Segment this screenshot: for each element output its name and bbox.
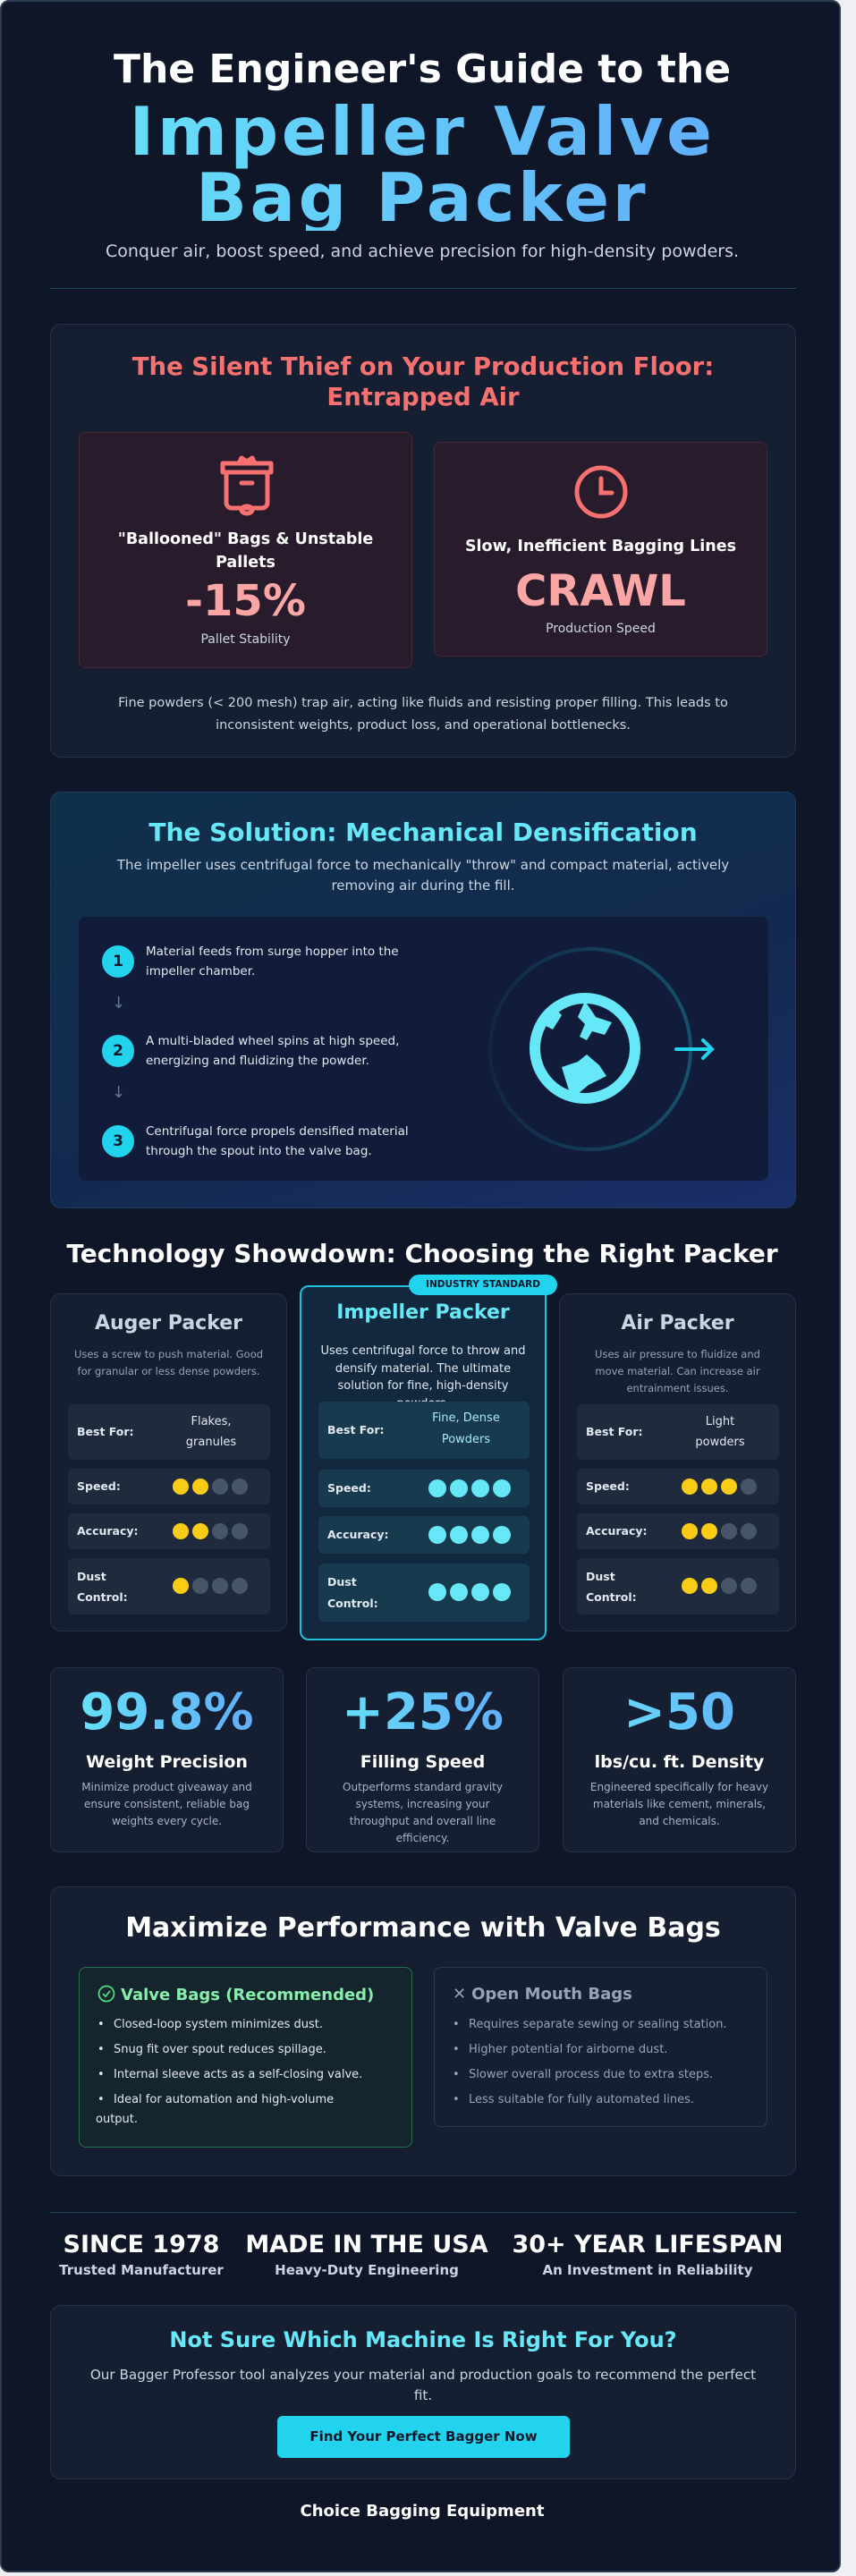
arrow down 1: ↓ (112, 994, 125, 1013)
footer: Choice Bagging Equipment (301, 2502, 544, 2521)
panel: auger packer: Accuracy: (77, 1524, 139, 1538)
panel: impeller packer: Dust (327, 1575, 357, 1589)
valve bags recommended (79, 1967, 412, 2148)
open mouth bags: Slower overall process due to extra steps. (469, 2068, 713, 2081)
stat: density: >50 (623, 1683, 735, 1741)
step 2: 2 (113, 1042, 123, 1060)
panel: auger packer: Flakes, (191, 1415, 232, 1428)
step 1 (102, 945, 399, 979)
open mouth bags: Less suitable for fully automated lines. (469, 2093, 694, 2106)
panel: impeller packer: Control: (327, 1597, 378, 1610)
stat: filling speed: Filling Speed (360, 1752, 485, 1772)
panel: impeller packer: Uses centrifugal force to throw and densify material. The ultimate solution for fine, high-density powders. (320, 1344, 526, 1410)
trust badges (59, 2231, 784, 2278)
panel: air packer: Uses air pressure to fluidize and move material. Can increase air entrainment issues. (595, 1348, 760, 1394)
panel: air packer: Best For: (586, 1425, 643, 1438)
button (277, 2416, 570, 2458)
valve bags recommended: Snug fit over spout reduces spillage. (114, 2043, 326, 2056)
panel: impeller packer: Best For: (327, 1423, 385, 1436)
panel: air packer: Air Packer (621, 1312, 734, 1335)
step 2: energizing and fluidizing the powder. (146, 1054, 369, 1068)
panel: auger packer: Uses a screw to push material. Good for granular or less dense powders. (74, 1348, 263, 1377)
step 1: 1 (113, 953, 123, 970)
panel: air packer: Control: (586, 1590, 637, 1604)
badge: industry standard: INDUSTRY STANDARD (426, 1279, 540, 1290)
panel: CTA: Not Sure Which Machine Is Right For You? (169, 2327, 677, 2352)
problem card: slow lines: Slow, Inefficient Bagging Lines (465, 538, 736, 555)
step 2 (102, 1034, 399, 1068)
panel: air packer: Speed: (586, 1479, 630, 1493)
valve bags recommended: Internal sleeve acts as a self-closing valve. (114, 2068, 362, 2081)
solution heading: The Solution: Mechanical Densification (148, 818, 698, 847)
problem heading (132, 352, 714, 411)
process box (79, 917, 768, 1181)
panel: auger packer: Control: (77, 1590, 128, 1604)
panel: CTA (50, 2305, 796, 2479)
problem heading: The Silent Thief on Your Production Floor: (132, 352, 714, 381)
stat: weight precision (50, 1667, 284, 1852)
icon: clock (574, 465, 628, 519)
trust badges: Heavy-Duty Engineering (275, 2262, 459, 2278)
stat: filling speed (306, 1667, 539, 1852)
panel: solution (50, 792, 796, 1208)
panel: valve bags (50, 1886, 796, 2176)
problem card: ballooned bags (79, 432, 412, 668)
panel: auger packer (50, 1293, 287, 1631)
title: Bag Packer (196, 158, 648, 237)
stat: density: lbs/cu. ft. Density (595, 1752, 764, 1772)
stat: filling speed: Outperforms standard gravity systems, increasing your throughput and overall line efficiency. (343, 1781, 503, 1844)
badge: industry standard (409, 1275, 557, 1295)
valve bags recommended: Closed-loop system minimizes dust. (114, 2018, 323, 2031)
stat: density (563, 1667, 796, 1852)
button: Find Your Perfect Bagger Now (309, 2428, 538, 2445)
panel: auger packer: granules (186, 1436, 236, 1449)
problem card: ballooned bags: -15% (185, 576, 306, 626)
open mouth bags: ✕ Open Mouth Bags (453, 1985, 632, 2004)
panel: impeller packer (300, 1285, 547, 1640)
impeller diagram (488, 947, 715, 1151)
panel: air packer: Accuracy: (586, 1524, 648, 1538)
trust badges: 30+ YEAR LIFESPAN (512, 2231, 784, 2258)
comparison heading: Technology Showdown: Choosing the Right Packer (66, 1239, 778, 1268)
step 3: Centrifugal force propels densified material (146, 1124, 409, 1139)
title (114, 47, 731, 237)
arrow down 2: ↓ (112, 1083, 125, 1102)
problem card: ballooned bags: Pallet Stability (200, 632, 290, 647)
stat: filling speed: +25% (342, 1683, 504, 1741)
problem card: slow lines: CRAWL (515, 566, 686, 616)
problem description: Fine powders (< 200 mesh) trap air, acting like fluids and resisting proper filling. This leads to inconsistent weights, product loss, and operational bottlenecks. (118, 696, 728, 733)
stat: density: Engineered specifically for heavy materials like cement, minerals, and chemicals. (590, 1781, 768, 1827)
panel: air packer: Dust (586, 1570, 615, 1583)
problem card: slow lines: Production Speed (546, 622, 656, 636)
panel: air packer: powders (695, 1436, 745, 1449)
panel: problem (50, 324, 796, 758)
stat: weight precision: Minimize product giveaway and ensure consistent, reliable bag weights every cycle. (81, 1781, 252, 1827)
open mouth bags (434, 1967, 767, 2127)
open mouth bags: Higher potential for airborne dust. (469, 2043, 667, 2056)
step 1: Material feeds from surge hopper into the (146, 945, 399, 959)
icon: bag (220, 456, 274, 515)
panel: auger packer: Best For: (77, 1425, 134, 1438)
step 3: through the spout into the valve bag. (146, 1144, 372, 1158)
title: Impeller Valve (129, 92, 716, 171)
step 2: A multi-bladed wheel spins at high speed, (146, 1034, 399, 1048)
title: The Engineer's Guide to the (114, 47, 731, 92)
panel: CTA: Our Bagger Professor tool analyzes your material and production goals to recommend the perfect (90, 2367, 756, 2383)
valve bags recommended: Valve Bags (Recommended) (121, 1986, 374, 2004)
panel: impeller packer: Fine, Dense (432, 1411, 500, 1425)
panel: CTA: fit. (414, 2387, 432, 2403)
panel: impeller packer: Powders (442, 1433, 490, 1446)
open mouth bags: Requires separate sewing or sealing station. (469, 2018, 727, 2031)
step 3 (102, 1124, 409, 1158)
valve bags recommended: Ideal for automation and high-volume (114, 2093, 334, 2106)
panel: impeller packer: Accuracy: (327, 1528, 389, 1541)
trust badges: Trusted Manufacturer (59, 2262, 224, 2278)
step 1: impeller chamber. (146, 964, 255, 979)
panel: air packer (559, 1293, 796, 1631)
trust badges: An Investment in Reliability (542, 2262, 752, 2278)
panel: auger packer: Speed: (77, 1479, 121, 1493)
stat: weight precision: Weight Precision (86, 1752, 248, 1772)
problem card: ballooned bags: Pallets (216, 554, 275, 572)
solution subtitle: The impeller uses centrifugal force to mechanically "throw" and compact material, actively removing air during the fill. (117, 857, 729, 894)
step 3: 3 (113, 1132, 123, 1150)
trust badges: MADE IN THE USA (245, 2231, 488, 2258)
problem heading: Entrapped Air (326, 383, 520, 411)
stat: weight precision: 99.8% (80, 1683, 254, 1741)
panel: air packer: Light (706, 1415, 734, 1428)
problem card: slow lines (434, 442, 767, 657)
panel: auger packer: Auger Packer (95, 1312, 242, 1335)
valve bags recommended: output. (96, 2113, 138, 2126)
panel: auger packer: Dust (77, 1570, 106, 1583)
panel: impeller packer: Impeller Packer (336, 1301, 510, 1324)
trust badges: SINCE 1978 (64, 2231, 219, 2258)
subtitle: Conquer air, boost speed, and achieve precision for high-density powders. (106, 242, 739, 261)
panel: valve bags: Maximize Performance with Valve Bags (125, 1912, 721, 1944)
problem card: ballooned bags: "Ballooned" Bags & Unstable (118, 530, 373, 548)
panel: impeller packer: Speed: (327, 1481, 371, 1495)
